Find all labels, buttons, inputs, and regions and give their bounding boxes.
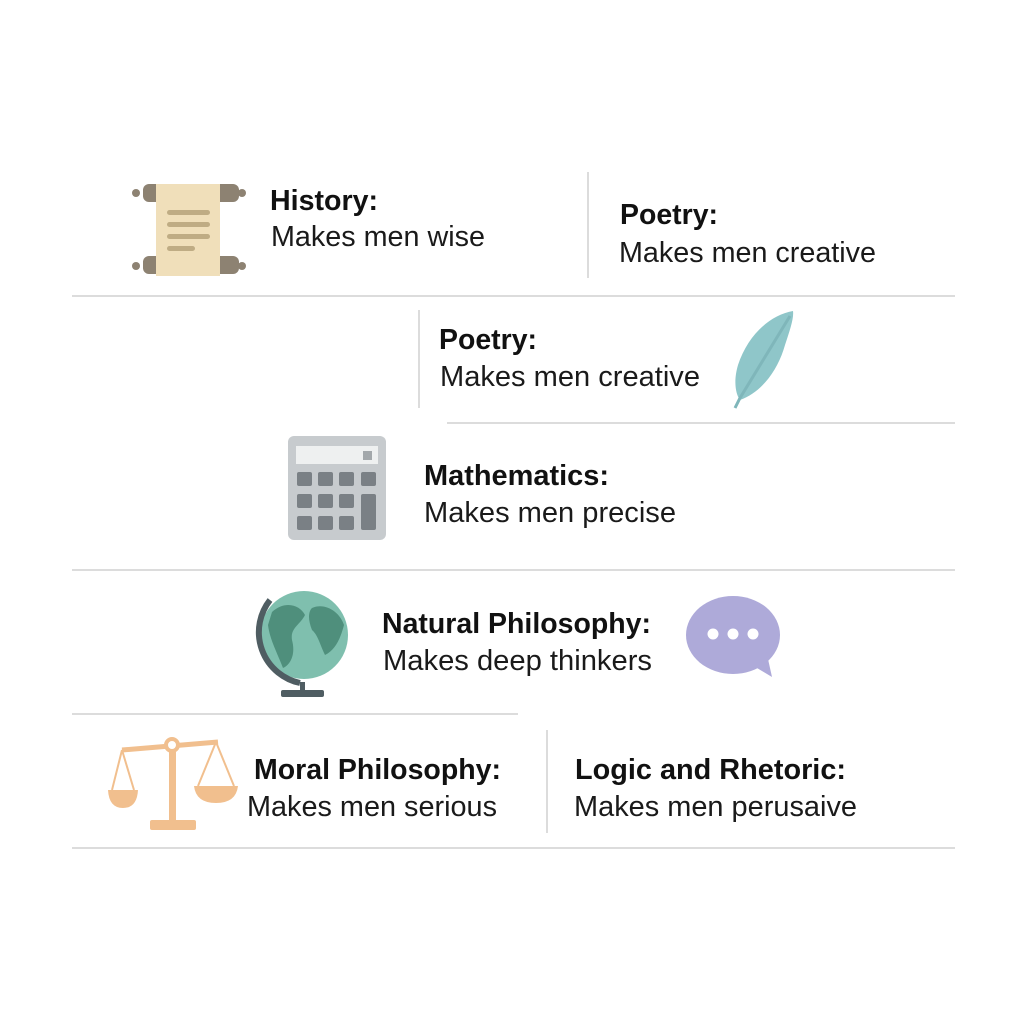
text: poetry top: Makes men creative xyxy=(619,237,876,269)
text: moral philosophy: Moral Philosophy: xyxy=(254,754,501,786)
text: poetry second: Makes men creative xyxy=(440,361,700,393)
text: moral philosophy: Makes men serious xyxy=(247,791,497,823)
text: history xyxy=(270,185,485,253)
icon: globe xyxy=(259,591,348,697)
text: mathematics: Makes men precise xyxy=(424,497,676,529)
text: mathematics xyxy=(424,460,676,529)
icon: calculator xyxy=(288,436,386,540)
text: poetry top: Poetry: xyxy=(620,199,718,231)
text: logic and rhetoric xyxy=(574,754,857,823)
text: moral philosophy xyxy=(247,754,501,823)
text: natural philosophy: Natural Philosophy: xyxy=(382,608,651,640)
text: poetry second: Poetry: xyxy=(439,324,537,356)
icon: scroll xyxy=(132,184,246,276)
text: logic and rhetoric: Makes men perusaive xyxy=(574,791,857,823)
icon: speech bubble xyxy=(686,596,780,677)
text: natural philosophy: Makes deep thinkers xyxy=(383,645,652,677)
text: mathematics: Mathematics: xyxy=(424,460,609,492)
text: natural philosophy xyxy=(382,608,652,677)
text: poetry top xyxy=(619,199,876,269)
text: logic and rhetoric: Logic and Rhetoric: xyxy=(575,754,846,786)
icon: feather xyxy=(735,311,793,408)
text: history: History: xyxy=(270,185,378,217)
icon: scales xyxy=(108,739,238,830)
text: poetry second xyxy=(439,324,700,393)
text: history: Makes men wise xyxy=(271,221,485,253)
